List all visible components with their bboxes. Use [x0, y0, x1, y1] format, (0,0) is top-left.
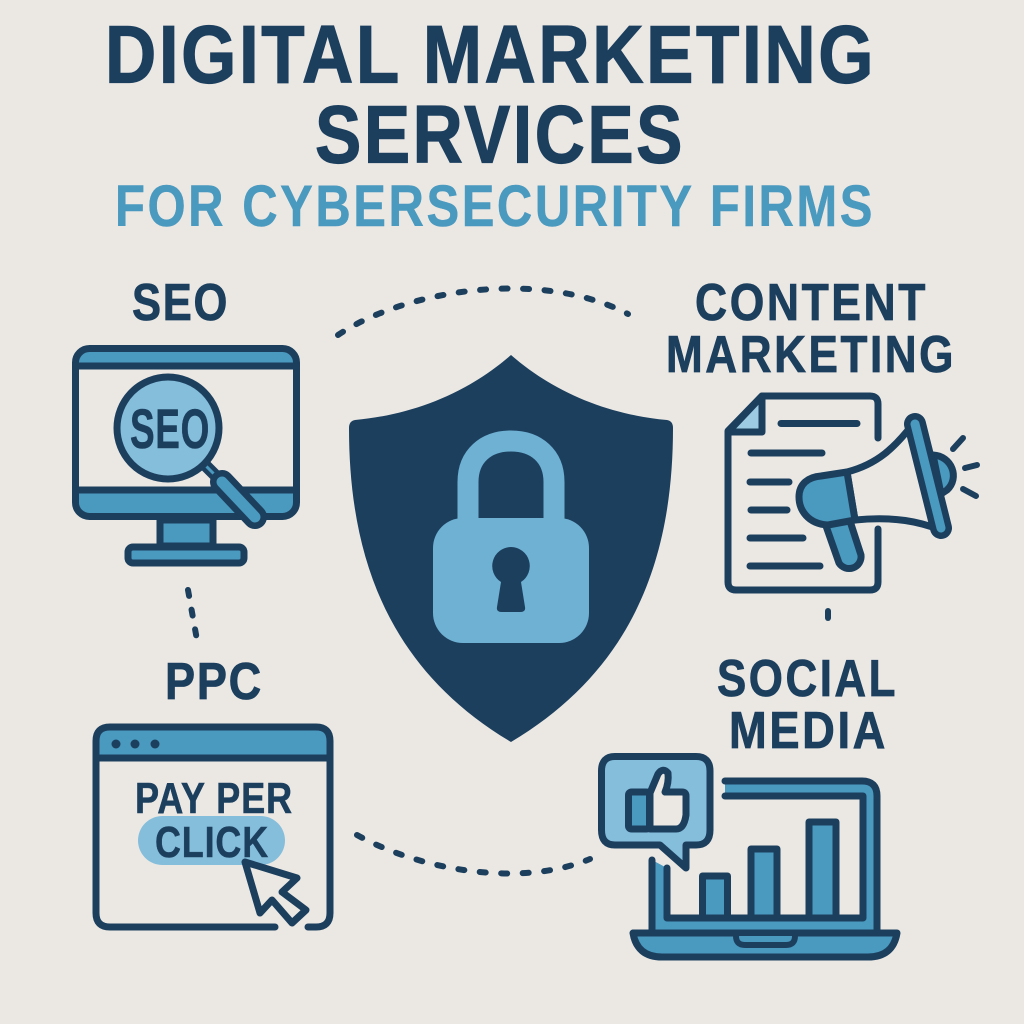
heading: content marketing: MARKETING — [666, 326, 956, 384]
heading: content marketing: CONTENT — [695, 274, 928, 332]
title — [105, 10, 876, 180]
button text — [135, 774, 293, 867]
heading: content marketing — [666, 274, 956, 384]
icon: monitor with magnifier — [76, 348, 296, 563]
heading: social media — [717, 650, 898, 760]
heading: social media: SOCIAL — [717, 650, 898, 708]
button text: PAY PER — [135, 774, 293, 823]
icon: browser window with click — [96, 727, 330, 927]
button text: CLICK — [155, 818, 269, 867]
like bubble — [602, 756, 710, 868]
heading: SEO: SEO — [132, 274, 229, 332]
heading: PPC: PPC — [165, 653, 263, 711]
heading: social media: MEDIA — [729, 702, 888, 760]
icon: document with megaphone — [728, 396, 977, 590]
subtitle: FOR CYBERSECURITY FIRMS — [115, 174, 875, 239]
magnifier label: SEO — [130, 397, 210, 460]
title: DIGITAL MARKETING — [105, 10, 876, 100]
title: SERVICES — [315, 90, 685, 180]
icon: laptop with bar chart and like bubble — [602, 756, 897, 957]
dotted connectors — [188, 289, 828, 873]
central shield with padlock — [349, 355, 673, 742]
